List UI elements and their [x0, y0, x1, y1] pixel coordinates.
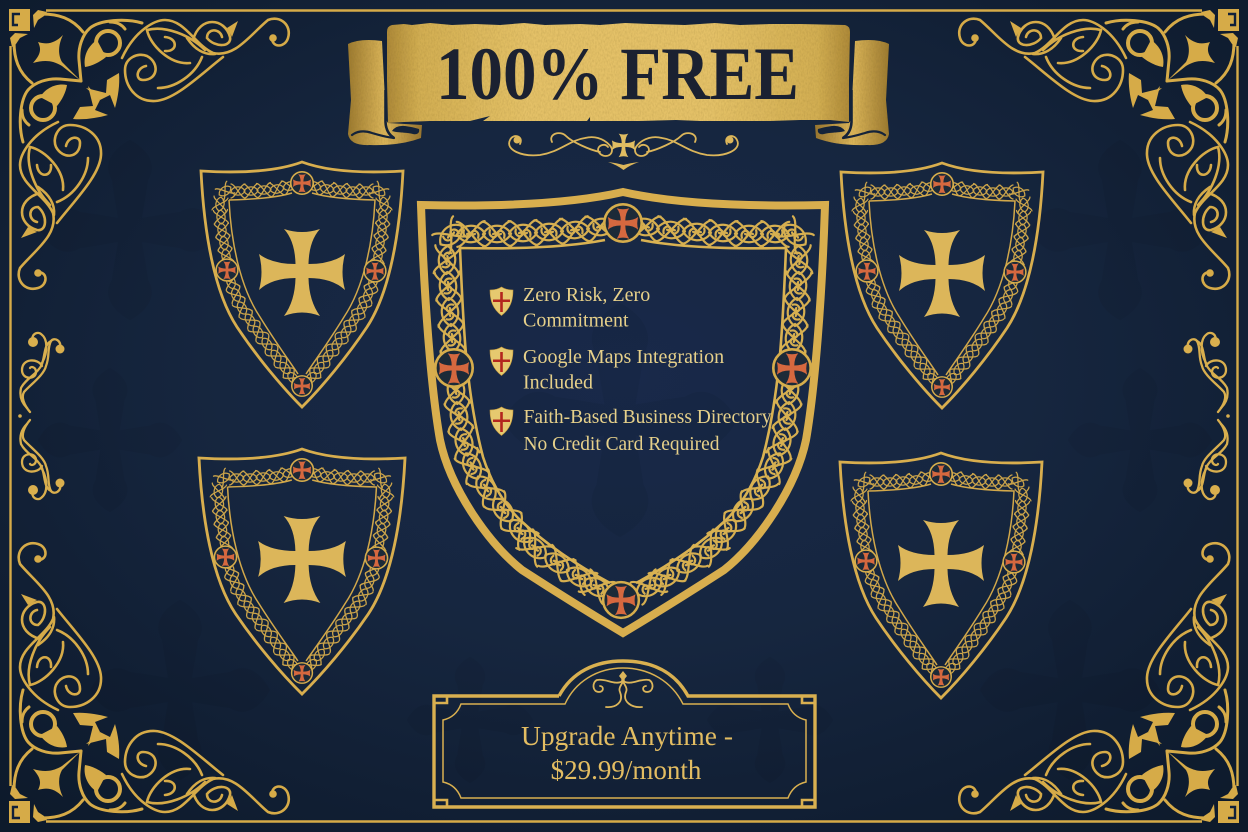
- title text: 100% FREE: [436, 33, 799, 116]
- shield: top right: [841, 163, 1043, 408]
- benefit: directory: Faith-Based Business Directory: [524, 406, 772, 428]
- benefit: google maps: [490, 346, 724, 394]
- upgrade plaque: [434, 661, 815, 807]
- central shield frame: [421, 192, 825, 633]
- benefit: zero risk: Zero Risk, Zero: [523, 284, 650, 306]
- plaque text: Upgrade Anytime -: [521, 721, 733, 751]
- benefit: zero risk: [490, 284, 650, 332]
- flourish under banner: [509, 133, 738, 170]
- medallions: [435, 204, 811, 618]
- central shield: [421, 192, 825, 633]
- plaque frame: [434, 661, 815, 807]
- benefit: directory: No Credit Card Required: [524, 433, 720, 455]
- benefit: google maps: Google Maps Integration: [523, 346, 724, 368]
- corner ornament: bottom left: [9, 543, 289, 823]
- benefit: directory: [490, 406, 772, 455]
- banner right roll: [815, 40, 889, 145]
- title banner: [348, 23, 889, 145]
- corner ornament: top right: [959, 9, 1239, 289]
- shield: top left: [201, 162, 403, 407]
- benefit: google maps: Included: [523, 372, 593, 394]
- upgrade plaque: $29.99/month: [551, 755, 702, 785]
- shield: bottom left: [199, 449, 405, 694]
- banner parchment: [387, 23, 850, 123]
- shield: bottom right: [840, 453, 1042, 698]
- side ornament: left: [18, 333, 64, 499]
- plaque ornament: [593, 671, 653, 707]
- banner left roll: [348, 40, 422, 145]
- corner ornament: bottom right: [959, 543, 1239, 823]
- corner ornament: top left: [9, 9, 289, 289]
- side ornament: right: [1184, 333, 1230, 499]
- benefit: zero risk: Commitment: [523, 310, 629, 332]
